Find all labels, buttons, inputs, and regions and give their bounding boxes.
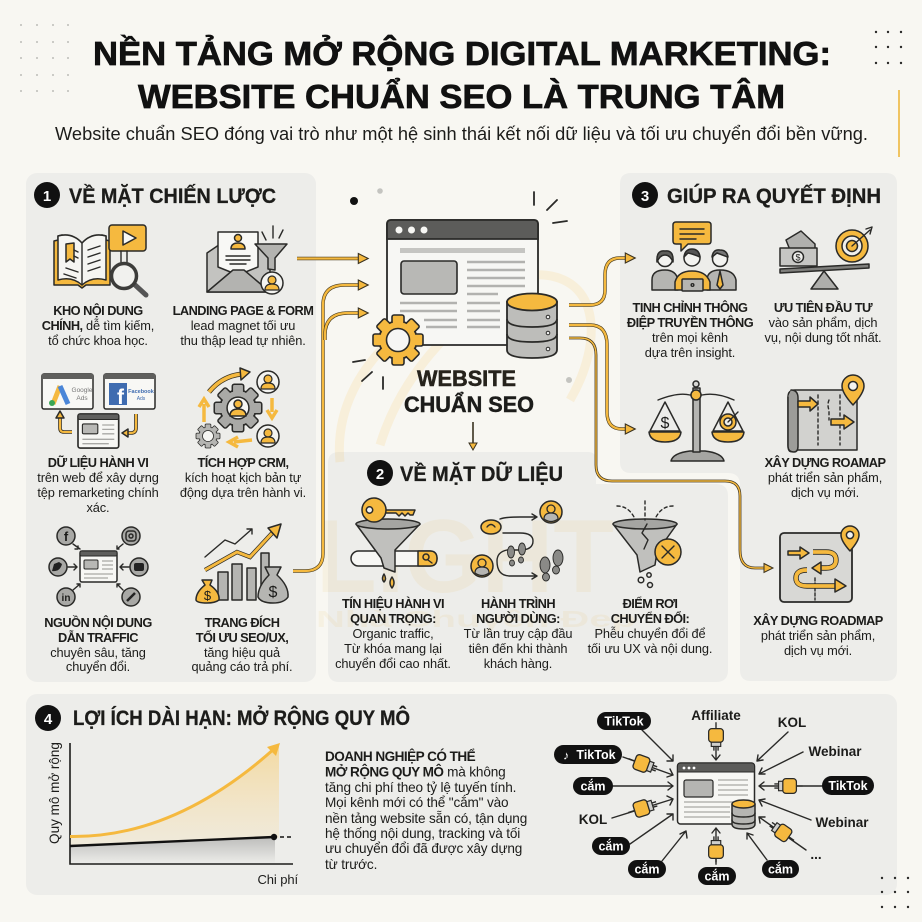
text: content sources: DẪN TRAFFIC — [58, 630, 138, 645]
text: conversion drop-off: Phễu chuyển đổi để — [595, 626, 705, 641]
arrow: website to data — [469, 422, 477, 450]
text: knowledge base: tổ chức khoa học. — [48, 333, 148, 348]
text: behavior data: trên web để xây dựng — [37, 470, 159, 485]
heading: section 3: GIÚP RA QUYẾT ĐỊNH — [667, 184, 881, 208]
icon: ads to website: Ads — [76, 395, 88, 402]
heading: section 4: 4 — [44, 711, 53, 728]
watermark: brand text: LIGHT — [316, 499, 614, 615]
text: conversion drop-off: CHUYỂN ĐỔI: — [611, 611, 690, 626]
text: user journey: tiên đến khi thành — [469, 641, 567, 656]
accent bar top right — [898, 90, 900, 157]
text: refine messaging: ĐIỆP TRUYỀN THÔNG — [627, 315, 754, 330]
text: landing optimization: TRANG ĐÍCH — [205, 615, 280, 630]
icon: ads to website: f — [117, 386, 125, 409]
text: user journey: HÀNH TRÌNH — [481, 596, 555, 611]
title — [93, 34, 831, 115]
channel pills: cắm — [634, 862, 660, 876]
icon: money versus target seesaw — [780, 227, 872, 289]
text: content sources: NGUỒN NỘI DUNG — [44, 615, 152, 630]
channel pills: cắm — [580, 778, 606, 794]
icon: team with message bubble — [652, 222, 736, 291]
heading: section 1: 1 — [43, 188, 51, 205]
channel labels: KOL — [778, 715, 806, 730]
text: roamap: XÂY DỰNG ROAMAP — [765, 455, 886, 470]
heading: section 1: VỀ MẶT CHIẾN LƯỢC — [69, 185, 276, 208]
watermark: logo swoosh — [339, 275, 591, 462]
text: conversion drop-off: tối ưu UX và nội dung. — [588, 641, 712, 656]
icon: customer journey footprints — [471, 501, 563, 581]
decorative dots bottom right — [881, 877, 909, 908]
text: scaling explanation: nền tảng website sẵn có, tận dụng — [325, 811, 527, 826]
channel pills: cắm — [704, 868, 730, 884]
text: behavior signals: Từ khóa mang lại — [344, 641, 442, 656]
text: refine messaging: TINH CHỈNH THÔNG — [633, 300, 748, 315]
channel labels: Webinar — [815, 815, 869, 830]
text: CRM: kích hoạt kịch bản tự — [185, 470, 302, 485]
panel: long-term benefit content — [35, 705, 874, 887]
text: behavior signals: Organic traffic, — [352, 626, 434, 641]
diagram: channels plugging into website — [554, 708, 874, 885]
channel labels — [579, 708, 869, 862]
icon: balance scales — [649, 381, 744, 461]
text: landing page: lead magnet tối ưu — [191, 318, 295, 333]
icon: social traffic sources: in — [62, 593, 70, 604]
icon: balance scales: $ — [661, 415, 670, 432]
text: investment priority: vào sản phẩm, dịch — [769, 315, 877, 330]
channel labels: Webinar — [808, 744, 862, 759]
heading: section 3: 3 — [641, 188, 649, 205]
connector arrows — [612, 730, 822, 862]
panel: long-term benefit background — [26, 694, 897, 895]
website mini window — [678, 763, 755, 829]
channel pills: cắm — [598, 838, 624, 854]
panel: strategy content — [34, 182, 313, 674]
icon: map with pin — [788, 375, 864, 452]
icon: ads to website — [42, 374, 155, 448]
icon: ads to website: Google — [72, 387, 93, 394]
icon: roadmap with switchback — [780, 526, 859, 602]
text: scaling explanation: Mọi kênh mới có thể "cắm" vào — [325, 795, 508, 810]
label: website chuẩn seo: CHUẨN SEO — [404, 392, 534, 417]
text: behavior data: xác. — [86, 500, 110, 515]
text: scaling explanation: từ trước. — [325, 857, 377, 872]
icon: ads to website: Ads — [137, 396, 146, 402]
text: scaling explanation: tăng chi phí theo tỷ lệ tuyến tính. — [325, 780, 516, 795]
panel: decisions content — [627, 182, 886, 658]
decorative accent marks — [350, 188, 572, 389]
text: user journey: Từ lần truy cập đầu — [464, 626, 572, 641]
text: roadmap: XÂY DỰNG ROADMAP — [753, 613, 884, 628]
icon: gear — [373, 315, 423, 365]
icon: database — [507, 294, 557, 358]
icon: book and magnifier — [54, 225, 146, 295]
text: user journey: NGƯỜI DÙNG: — [476, 611, 560, 626]
text: landing page: LANDING PAGE & FORM — [173, 303, 313, 318]
icon: ads to website: Facebook — [128, 389, 155, 395]
text: scaling explanation: MỞ RỘNG QUY MÔ mà không — [325, 764, 506, 780]
heading: section 4: LỢI ÍCH DÀI HẠN: MỞ RỘNG QUY MÔ — [73, 706, 410, 730]
icon: growth chart with money bags: $ — [269, 584, 278, 601]
icon: browser window — [387, 220, 538, 345]
subtitle: Website chuẩn SEO đóng vai trò như một hệ sinh thái kết nối dữ liệu và tối ưu chuyển đổi bền vững. — [55, 123, 868, 144]
text: knowledge base: CHÍNH, dễ tìm kiếm, — [42, 318, 154, 333]
panel: data content — [335, 460, 712, 671]
text: roamap: phát triển sản phẩm, — [768, 470, 882, 485]
plugs — [626, 722, 803, 865]
text: behavior data: DỮ LIỆU HÀNH VI — [48, 455, 148, 470]
icon: money versus target seesaw: $ — [795, 252, 801, 262]
text: investment priority: vụ, nội dung tốt nhất. — [765, 330, 881, 345]
panel: decisions background — [620, 173, 897, 681]
title: NỀN TẢNG MỞ RỘNG DIGITAL MARKETING: — [93, 34, 831, 72]
panel: data background — [328, 452, 728, 682]
text: behavior signals: TÍN HIỆU HÀNH VI — [342, 596, 444, 611]
text: content sources: chuyển đổi. — [66, 659, 130, 674]
watermark: brand text: Nhà Chuyên Đẹp — [316, 606, 636, 632]
text: refine messaging: trên mọi kênh — [652, 330, 728, 345]
heading: section 2: 2 — [376, 466, 384, 483]
text: scaling explanation: DOANH NGHIỆP CÓ THỂ — [325, 749, 476, 764]
channel labels: ... — [810, 847, 822, 862]
icon: CRM automation gears — [196, 368, 279, 448]
label: website chuẩn seo — [404, 366, 534, 417]
text: scaling explanation: hệ thống nội dung, tracking và tối — [325, 826, 520, 841]
channel pills: ♪ — [563, 748, 569, 762]
channel labels: Affiliate — [691, 708, 741, 723]
title: WEBSITE CHUẨN SEO LÀ TRUNG TÂM — [138, 78, 785, 115]
channel pills: TikTok — [576, 748, 616, 762]
icon: social traffic sources — [49, 527, 148, 606]
text: landing optimization: TỐI ƯU SEO/UX, — [196, 630, 288, 645]
text: investment priority: ƯU TIÊN ĐẦU TƯ — [774, 300, 873, 315]
text: scaling explanation: ưu chuyển đổi đã được xây dựng — [325, 841, 522, 856]
text: roadmap: dịch vụ mới. — [784, 643, 852, 658]
text: landing optimization: tăng hiệu quả — [204, 645, 281, 660]
arrows: website to decisions — [569, 253, 773, 573]
chart: scale versus cost: Chi phí — [258, 872, 298, 887]
text: content sources: chuyên sâu, tăng — [50, 645, 146, 660]
chart: scale versus cost: Quy mô mở rộng — [47, 742, 62, 844]
panel: strategy background — [26, 173, 316, 682]
decorative dots top right — [875, 31, 902, 64]
central website hub — [350, 188, 572, 450]
label: website chuẩn seo: WEBSITE — [417, 366, 516, 391]
decorative dots top left — [20, 24, 69, 92]
text: knowledge base: KHO NỘI DUNG — [53, 303, 143, 318]
channel pills: TikTok — [604, 714, 644, 728]
text: landing page: thu thập lead tự nhiên. — [180, 333, 306, 348]
channel pills: TikTok — [828, 779, 868, 793]
text: roadmap: phát triển sản phẩm, — [761, 628, 875, 643]
heading: section 2: VỀ MẶT DỮ LIỆU — [400, 462, 563, 486]
text: behavior signals: QUAN TRỌNG: — [350, 611, 436, 626]
channel labels: KOL — [579, 812, 607, 827]
icon: broken funnel with drop-off — [613, 501, 681, 588]
channel pills — [554, 712, 874, 885]
icon: growth chart with money bags: $ — [204, 588, 212, 603]
text: refine messaging: dựa trên insight. — [645, 345, 735, 360]
text: behavior signals: chuyển đổi cao nhất. — [335, 656, 451, 671]
text: behavior data: tệp remarketing chính — [37, 485, 159, 500]
text: CRM: động dựa trên hành vi. — [180, 485, 306, 500]
icon: key, funnel and search bar — [351, 498, 437, 588]
icon: social traffic sources: f — [64, 529, 69, 544]
text: conversion drop-off: ĐIỂM RƠI — [623, 596, 677, 611]
channel pills: cắm — [768, 862, 793, 876]
icon: envelope, funnel and lead — [207, 226, 287, 294]
text: landing optimization: quảng cáo trả phí. — [191, 659, 293, 674]
icon: growth chart with money bags — [196, 524, 288, 603]
text: roamap: dịch vụ mới. — [791, 485, 859, 500]
text: CRM: TÍCH HỢP CRM, — [198, 455, 288, 470]
arrows: strategy to website — [293, 254, 368, 571]
text: user journey: khách hàng. — [484, 656, 552, 671]
chart: scale versus cost — [47, 742, 298, 887]
